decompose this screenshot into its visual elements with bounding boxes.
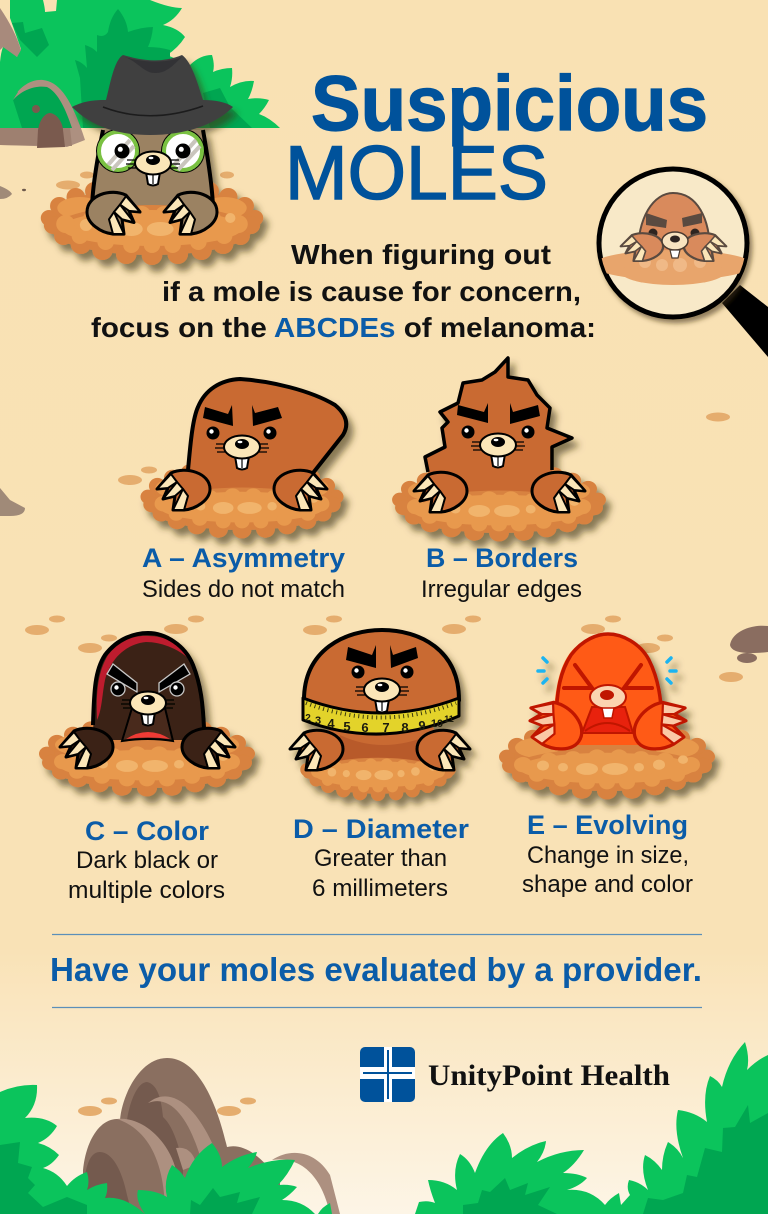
- label A: Sides do not match: [142, 576, 345, 603]
- label B: B – Borders: [426, 543, 578, 573]
- intro text: When figuring out: [291, 239, 551, 270]
- label A: A – Asymmetry: [142, 543, 345, 573]
- logo: UnityPoint Health: [360, 1047, 670, 1102]
- call to action: Have your moles evaluated by a provider.: [50, 951, 702, 988]
- mole A: asymmetry: [140, 379, 346, 539]
- label C: C – Color: [85, 816, 210, 846]
- label D: 6 millimeters: [312, 875, 448, 902]
- mole D: diameter with tape measure: [290, 630, 470, 801]
- dirt specks: [25, 172, 743, 1116]
- tape measure: 4: [327, 716, 335, 731]
- bottom rocks: [83, 1058, 340, 1214]
- tape measure: 5: [343, 719, 351, 734]
- mole E: evolving: [499, 633, 715, 800]
- intro text: focus on the ABCDEs of melanoma:: [91, 312, 596, 343]
- top-left bush and rock: [0, 0, 280, 148]
- label C: [68, 816, 225, 904]
- mole C: color: [39, 633, 255, 797]
- title: Suspicious: [311, 59, 708, 147]
- title: [285, 59, 708, 216]
- logo: UnityPoint Health: UnityPoint Health: [428, 1059, 670, 1092]
- label C: multiple colors: [68, 877, 225, 904]
- tape measure: 2: [305, 713, 311, 724]
- bottom-right bushes: [415, 1042, 768, 1214]
- label B: [421, 543, 582, 603]
- side rocks: [0, 186, 768, 663]
- tape measure: [303, 698, 459, 735]
- intro text: [91, 239, 596, 343]
- tape measure: 8: [401, 720, 409, 735]
- magnifying glass: [593, 169, 768, 357]
- tape measure: 6: [361, 720, 369, 735]
- label C: Dark black or: [76, 847, 218, 874]
- label E: [522, 810, 693, 898]
- bottom-left bushes: [0, 1085, 332, 1214]
- label D: Greater than: [314, 845, 447, 872]
- label A: [142, 543, 345, 603]
- label E: E – Evolving: [527, 810, 688, 840]
- intro text: if a mole is cause for concern,: [162, 276, 581, 307]
- label D: D – Diameter: [293, 814, 470, 844]
- label E: shape and color: [522, 871, 693, 898]
- mole in hat and glasses: [41, 55, 263, 265]
- label B: Irregular edges: [421, 576, 582, 603]
- tape measure: 9: [418, 718, 426, 733]
- label D: [293, 814, 470, 902]
- title: MOLES: [285, 131, 548, 216]
- tape measure: 7: [382, 720, 390, 735]
- tape measure: 11: [444, 714, 454, 724]
- mole B: borders: [392, 358, 606, 542]
- tape measure: 3: [315, 715, 321, 727]
- tape measure: 10: [431, 718, 443, 730]
- label E: Change in size,: [527, 842, 689, 869]
